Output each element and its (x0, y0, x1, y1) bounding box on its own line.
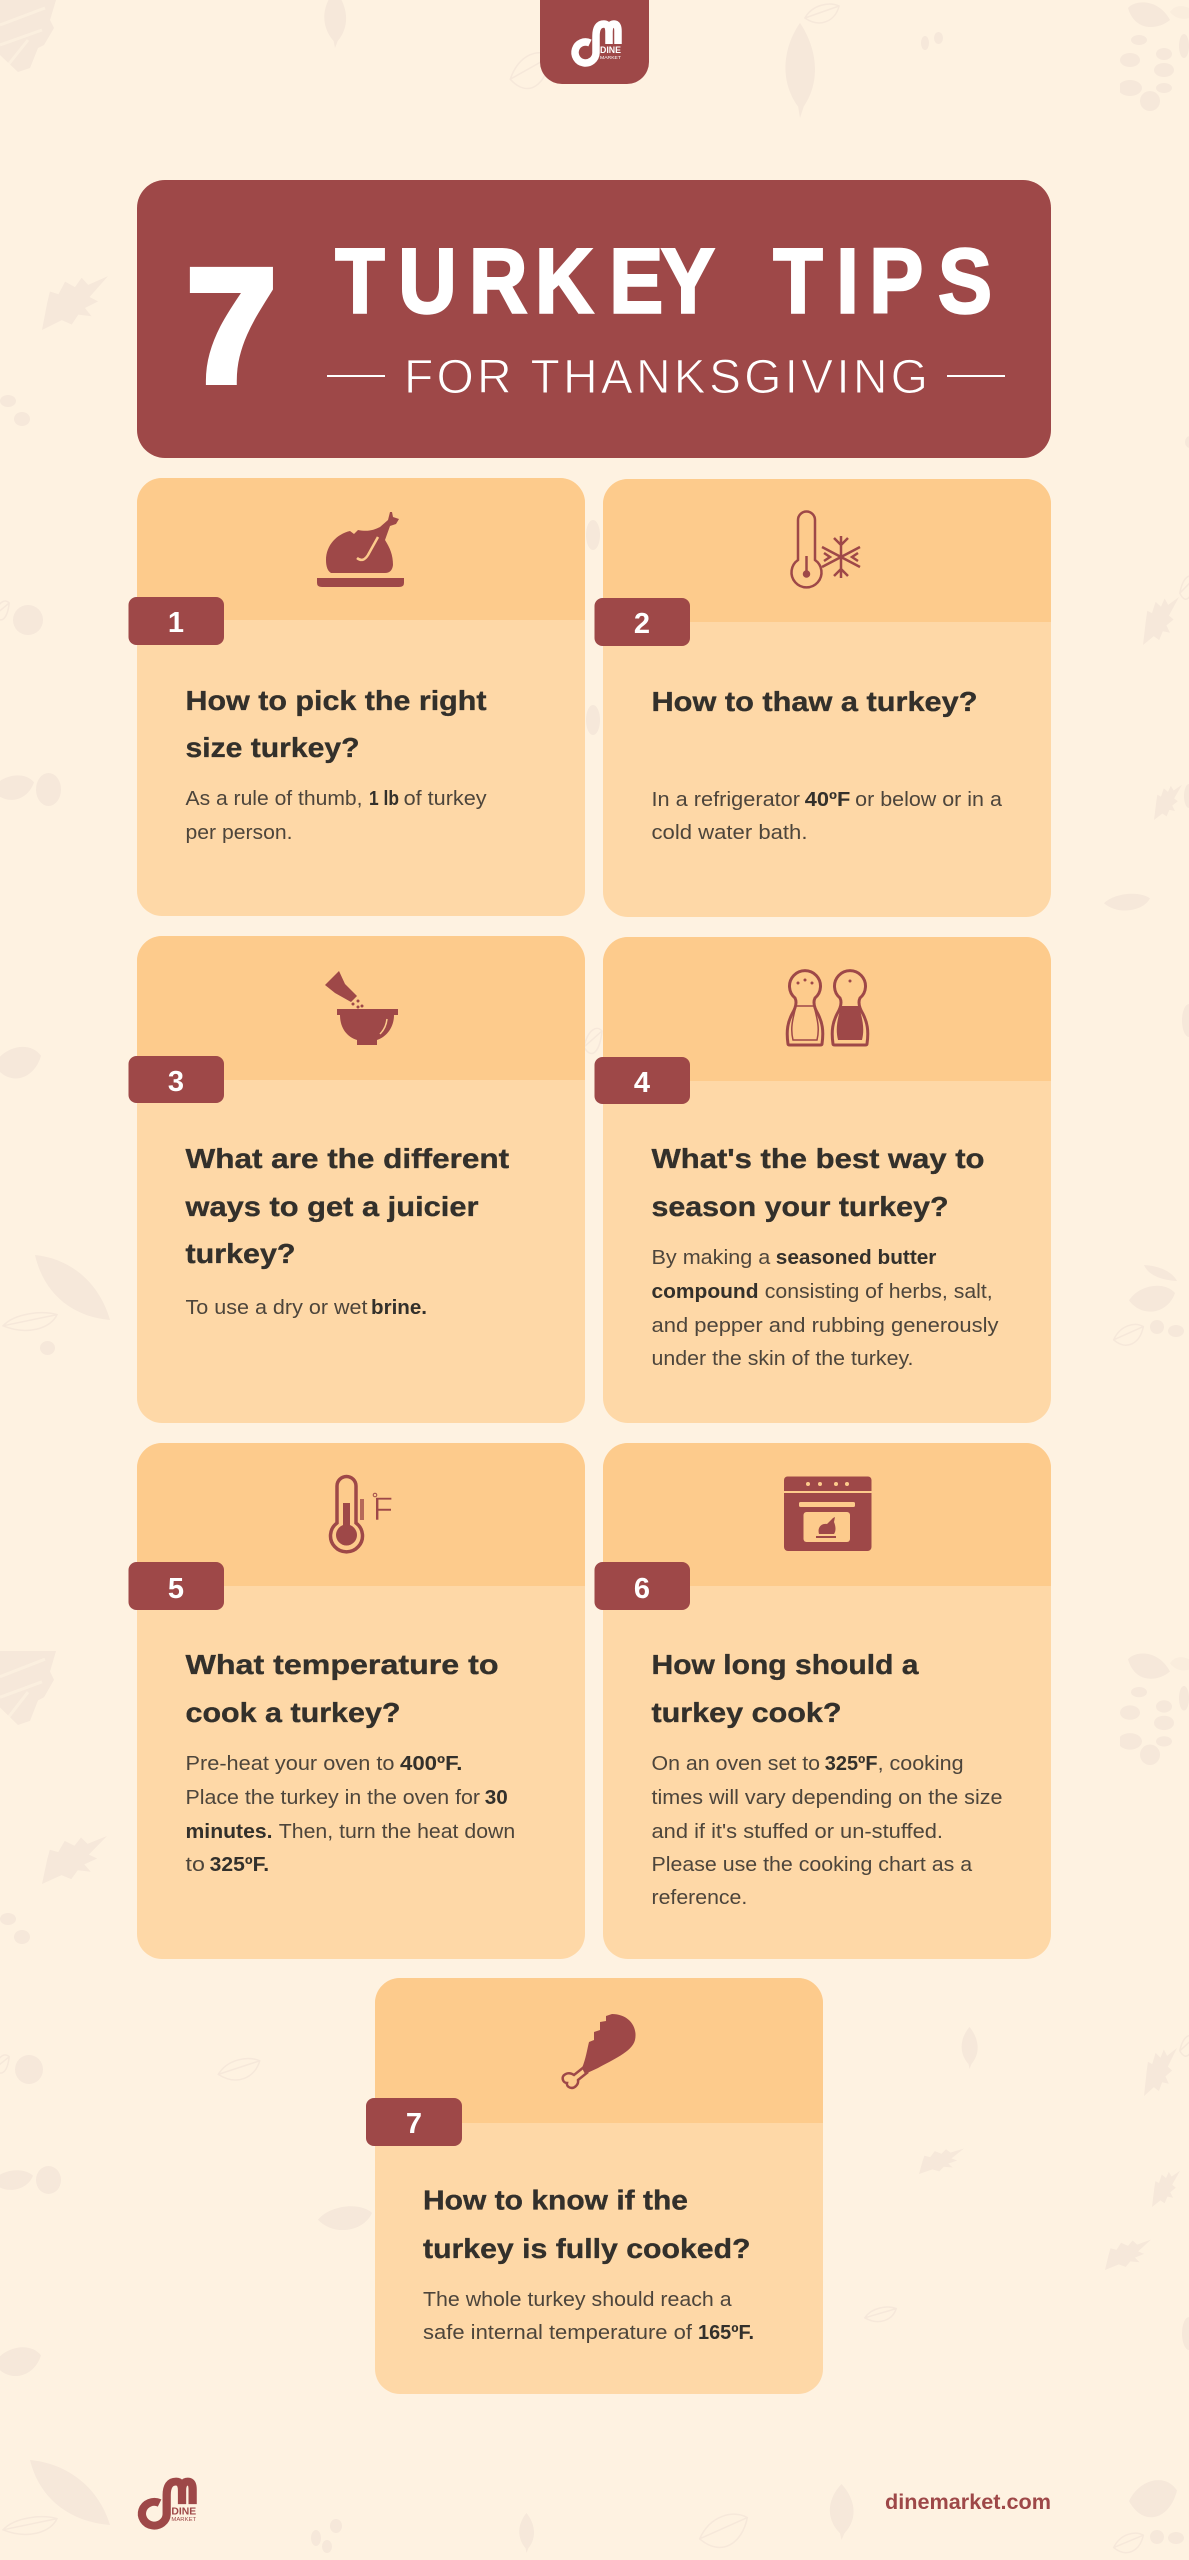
number badge 3: 3 (168, 1066, 184, 1098)
body 4: and pepper and rubbing generously (652, 1315, 998, 1337)
logo mark: MARKET (600, 55, 621, 60)
panel: tip 3 (128, 936, 585, 1423)
heading 6: turkey cook? (652, 1697, 842, 1728)
heading 5: cook a turkey? (186, 1697, 400, 1728)
body 3: brine. (371, 1297, 427, 1319)
number badge 2 (594, 598, 690, 646)
heading 4 (652, 1143, 984, 1222)
body 1: per person. (186, 822, 292, 844)
icon: roast turkey (317, 512, 404, 587)
number badge 1 (128, 597, 224, 645)
body 6: times will vary depending on the size (652, 1787, 1002, 1809)
body 6: On an oven set to (652, 1753, 820, 1775)
body 2: In a refrigerator (652, 789, 800, 811)
body 4: compound (652, 1281, 758, 1303)
number badge 6 (594, 1562, 690, 1610)
heading 4: What's the best way to (652, 1143, 984, 1174)
body 1 (186, 788, 487, 844)
logo tab (540, 0, 649, 84)
body 5 (186, 1753, 515, 1876)
number badge 5 (128, 1562, 224, 1610)
footer logo (142, 2482, 197, 2526)
number badge 5: 5 (168, 1573, 184, 1605)
body 7 (423, 2289, 754, 2344)
heading 7: turkey is fully cooked? (423, 2233, 750, 2264)
body 5: to (186, 1854, 205, 1876)
body 2: 40ºF (805, 789, 850, 811)
icon: salt and pepper shakers (787, 971, 868, 1045)
body 5: Pre-heat your oven to (186, 1753, 394, 1775)
icon: thermometer fahrenheit: F (373, 1491, 393, 1527)
body 7: safe internal temperature of (423, 2322, 692, 2344)
body 1: As a rule of thumb, (186, 788, 362, 810)
heading 3: What are the different (186, 1143, 509, 1174)
number badge 7 (366, 2098, 462, 2146)
heading 4: season your turkey? (652, 1191, 948, 1222)
panel: tip 4 (594, 937, 1051, 1423)
footer website: dinemarket.com (885, 2491, 1051, 2514)
heading 7: How to know if the (423, 2184, 688, 2216)
number badge 4: 4 (634, 1067, 650, 1099)
body 7: The whole turkey should reach a (423, 2289, 733, 2311)
body 4: under the skin of the turkey. (652, 1348, 914, 1370)
logo mark (575, 24, 621, 63)
heading 3: turkey? (186, 1238, 296, 1269)
heading 1: size turkey? (186, 732, 360, 763)
body 5: 30 (485, 1787, 508, 1809)
heading 1 (186, 685, 486, 763)
number badge 2: 2 (634, 608, 650, 640)
panel: tip 7 (366, 1978, 823, 2394)
heading 6 (652, 1649, 919, 1728)
logo mark: DINE (600, 45, 621, 55)
footer logo: DINE (171, 2506, 196, 2517)
body 4: consisting of herbs, salt, (765, 1281, 993, 1303)
panel: tip 2 (594, 479, 1051, 917)
body 6: Please use the cooking chart as a (652, 1854, 973, 1876)
body 6: 325ºF (825, 1753, 878, 1775)
body 3 (186, 1297, 427, 1319)
icon: oven with turkey (784, 1476, 872, 1551)
panel: tip 1 (128, 478, 585, 916)
heading 3: ways to get a juicier (184, 1191, 479, 1222)
body 5: minutes. (186, 1821, 272, 1843)
heading 5 (186, 1649, 498, 1728)
body 1: 1 lb (369, 788, 399, 810)
body 2: cold water bath. (652, 822, 808, 844)
heading 3 (184, 1143, 509, 1269)
body 6: reference. (652, 1887, 747, 1909)
number badge 1: 1 (168, 607, 184, 639)
footer logo: MARKET (171, 2517, 197, 2523)
heading 2: How to thaw a turkey? (652, 686, 978, 717)
body 5: 325ºF. (210, 1854, 269, 1876)
number badge 4 (594, 1057, 690, 1104)
number badge 6: 6 (634, 1573, 650, 1605)
icon: shaker and bowl (325, 971, 398, 1045)
panel: tip 5 (128, 1443, 585, 1959)
body 4 (652, 1247, 998, 1370)
body 3: To use a dry or wet (186, 1297, 368, 1319)
subtitle: FOR THANKSGIVING (404, 351, 928, 404)
body 6 (652, 1753, 1002, 1909)
title text: TURKEY TIPS (335, 231, 992, 333)
title banner (137, 180, 1051, 458)
body 5: 400ºF. (400, 1753, 462, 1775)
number badge 3 (128, 1056, 224, 1103)
heading 5: What temperature to (186, 1649, 498, 1680)
body 2: or below or in a (855, 789, 1003, 811)
heading 7 (423, 2184, 750, 2264)
icon: thermometer and snowflake (792, 512, 860, 587)
body 4: seasoned butter (776, 1247, 937, 1269)
icon: drumstick (563, 2014, 636, 2088)
body 7: 165ºF. (698, 2322, 754, 2344)
body 1: of turkey (404, 788, 487, 810)
body 5: Then, turn the heat down (279, 1821, 515, 1843)
heading 1: How to pick the right (186, 685, 486, 716)
body 4: By making a (652, 1247, 771, 1269)
body 6: and if it's stuffed or un-stuffed. (652, 1821, 943, 1843)
body 2 (652, 789, 1003, 844)
number badge 7: 7 (406, 2108, 422, 2140)
heading 6: How long should a (652, 1649, 919, 1680)
icon: thermometer fahrenheit (330, 1476, 393, 1552)
title numeral: 7 (187, 236, 276, 415)
panel: tip 6 (594, 1443, 1051, 1959)
body 6: , cooking (878, 1753, 964, 1775)
body 5: Place the turkey in the oven for (186, 1787, 480, 1809)
